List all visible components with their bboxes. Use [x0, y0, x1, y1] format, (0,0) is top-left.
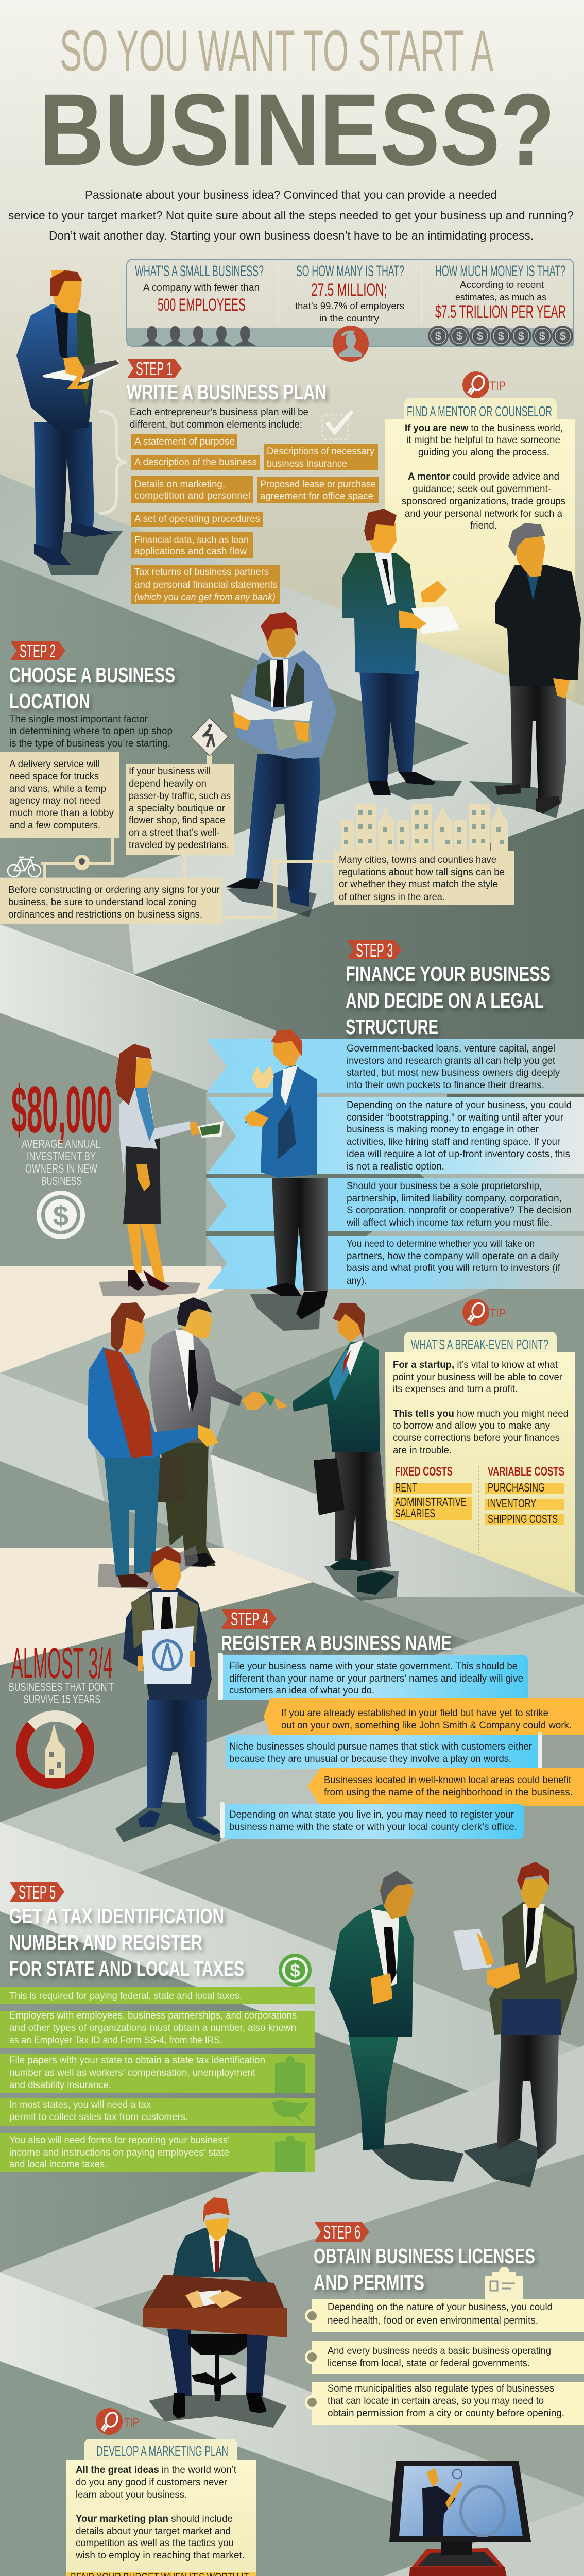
icon: seven dollar coins: $: [560, 330, 566, 343]
figure: man in teal suit with briefcase: [242, 1303, 399, 1601]
text box: city regulations: Many cities, towns and counties have: [339, 855, 496, 866]
costs table: INVENTORY: [488, 1497, 536, 1510]
stat: how many: SO HOW MANY IS THAT?: [296, 263, 404, 280]
tip body: guiding you along the process.: [418, 447, 549, 458]
text box: city regulations: [334, 851, 514, 905]
text: location factor: in determining where to open up shop: [9, 726, 173, 737]
panel: green tax boxes: and disability insurance.: [9, 2080, 111, 2091]
panel: business plan elements: competition and personnel: [134, 490, 250, 501]
heading: choose a business location: LOCATION: [9, 689, 90, 713]
text: location factor: [9, 714, 173, 749]
panel: license list: Some municipalities also regulate types of businesses: [328, 2383, 554, 2394]
panel: business plan elements: and personal financial statements: [134, 580, 278, 590]
tip body: Your marketing plan should include: [76, 2514, 233, 2524]
panel: green tax boxes: number as well as workers’ compensation, unemployment: [9, 2067, 256, 2078]
ribbon text: You need to determine whether you will take on: [347, 1239, 535, 1249]
panel: green tax boxes: permit to collect sales tax from customers.: [9, 2112, 188, 2123]
panel: business plan elements: A statement of purpose: [134, 436, 235, 447]
figure: man at desk: [143, 2197, 287, 2428]
figure: monitor on pedestal: [372, 2461, 544, 2576]
icon: tip bulb: [462, 371, 489, 398]
stat: what's a small business: WHAT’S A SMALL BUSINESS?: [135, 263, 264, 280]
ribbon text: [346, 1043, 572, 1286]
icon: dollar coin: $: [53, 1200, 68, 1231]
stat: almost 3/4: BUSINESSES THAT DON’T: [9, 1680, 114, 1693]
icon: seven dollar coins: $: [518, 330, 524, 343]
stat: how much money: [435, 263, 566, 322]
text box: delivery service: and a few computers.: [9, 820, 100, 831]
text box: delivery service: and vans, while a temp: [9, 784, 106, 794]
icon: seven dollar coins: $: [477, 330, 483, 343]
callout: niche businesses: [226, 1732, 542, 1769]
tip body: guidance; seek out government-: [413, 484, 551, 495]
tip body: sponsored organizations, trade groups: [402, 496, 565, 507]
figure: man in blue jacket and red sweater: [88, 1302, 218, 1589]
figure: mentor holding paper: [342, 509, 462, 800]
ribbon text: consider “bootstrapping,” or waiting until after your: [347, 1112, 564, 1123]
ribbon text: is not a realistic option.: [347, 1161, 444, 1172]
figure: man in grey suit: [149, 1297, 242, 1567]
figure: thoughtful man in black suit: [469, 523, 581, 818]
icon: pedestrian sign: [191, 718, 228, 765]
stat: how many: 27.5 MILLION;: [311, 280, 387, 300]
ribbon text: basis and what profit you will return to investors (if: [347, 1263, 561, 1274]
tip body: course corrections before your finances: [393, 1433, 560, 1444]
icon: dollar coin: [37, 1191, 85, 1239]
text box: signs: business, be sure to understand local zoning: [8, 897, 196, 908]
callout: file your name: [218, 1653, 528, 1700]
heading: obtain licenses: AND PERMITS: [314, 2270, 424, 2294]
text box: delivery service: agency may not need: [9, 795, 100, 806]
step 6 badge: [315, 2222, 369, 2243]
panel: business plan elements: business insurance: [267, 459, 347, 469]
stat: how many: [295, 263, 404, 324]
text: ALMOST 3/4: [11, 1639, 113, 1687]
panel: register name callouts: [218, 1653, 584, 1839]
text box: signs: [0, 878, 222, 924]
stat: what's a small business: A company with fewer than: [143, 282, 260, 293]
tip body: are in trouble.: [393, 1445, 452, 1456]
panel: license list: [305, 2299, 584, 2425]
panel: green tax boxes: File papers with your state to obtain a state tax identification: [9, 2055, 265, 2066]
heading: obtain licenses: [314, 2244, 535, 2294]
ribbon text: partnership, limited liability company, corporation,: [347, 1193, 562, 1204]
stat: almost 3/4: SURVIVE 15 YEARS: [23, 1692, 100, 1706]
tip body: details about your target market and: [76, 2526, 231, 2537]
panel: business plan elements: A set of operating procedures: [134, 514, 260, 524]
icon: five people: [141, 326, 256, 346]
panel: tip find a mentor: [385, 371, 575, 702]
text box: passer-by traffic: a specialty boutique or: [129, 803, 226, 814]
panel: tip break-even: [385, 1299, 575, 1594]
panel: business plan elements: A description of the business: [134, 457, 257, 468]
tip body: to borrow and allow you to make any: [393, 1420, 550, 1431]
icon: clipboard: [275, 2136, 305, 2172]
heading: get a tax id: NUMBER AND REGISTER: [9, 1930, 202, 1954]
figure: man reading map: [225, 612, 337, 917]
panel: business plan elements: Financial data, such as loan: [134, 535, 249, 546]
ribbon text: idea will require a lot of up-front inventory costs, this: [347, 1149, 570, 1160]
icon: green coin: [279, 1954, 312, 1987]
tip body: do you any good if customers never: [76, 2477, 228, 2488]
ribbon text: into their own pockets to finance their dreams.: [347, 1080, 544, 1091]
figure: man in blue jacket: [244, 1029, 328, 1331]
icon: US map: [272, 2100, 309, 2123]
panel: business plan elements: [131, 434, 379, 604]
panel: business plan elements: (which you can get from any bank): [134, 592, 276, 603]
panel: blue ribbons: [207, 1039, 584, 1289]
callout: niche businesses: Niche businesses should pursue names that stick with customers either: [229, 1741, 533, 1752]
tip body: For a startup, it’s vital to know at what: [393, 1360, 558, 1370]
callout: local areas: Businesses located in well-known local areas could benefit: [324, 1775, 572, 1786]
ribbon text: any).: [347, 1276, 367, 1286]
panel: green tax boxes: [0, 1987, 315, 2172]
stat: how much money: According to recent: [460, 280, 544, 290]
text box: city regulations: of other signs in the area.: [339, 892, 445, 903]
text box: passer-by traffic: depend heavily on: [129, 778, 207, 789]
costs table: [393, 1465, 564, 1554]
icon: curly bracket: [99, 411, 127, 514]
costs table: PURCHASING: [488, 1481, 545, 1494]
text: location factor: is the type of business you’re starting.: [9, 738, 170, 749]
panel: green tax boxes: as an Employer Tax ID and Form SS-4, from the IRS.: [9, 2035, 222, 2046]
text box: passer-by traffic: passer-by traffic, such as: [129, 791, 231, 802]
tip body: If you are new to the business world,: [405, 423, 563, 434]
costs table: SALARIES: [395, 1506, 435, 1520]
callout: local areas: from using the name of the neighborhood in the business.: [324, 1787, 573, 1798]
costs table: ADMINISTRATIVE: [395, 1495, 467, 1509]
tip body: wish to employ in reaching that market.: [75, 2550, 245, 2561]
tip body: competition as well as the tactics you: [76, 2538, 234, 2549]
stat: how many: in the country: [319, 313, 379, 324]
text box: signs: Before constructing or ordering any signs for your: [8, 885, 220, 895]
icon: tip bulb: [462, 1299, 489, 1326]
step 6 badge: STEP 6: [323, 2222, 360, 2243]
text box: passer-by traffic: flower shop, find space: [129, 815, 225, 826]
callout: register with the state: business name with the state or with your local county clerk’s office.: [229, 1822, 517, 1833]
callout: file your name: File your business name with your state government. This should be: [229, 1661, 518, 1672]
stat: $80,000: OWNERS IN NEW: [25, 1162, 97, 1175]
callout: file your name: different than your name or your partners’ names and ideally will give: [229, 1673, 523, 1684]
panel: license list: Depending on the nature of your business, you could: [328, 2302, 553, 2313]
intro text: Don’t wait another day. Starting your own business doesn’t have to be an intimidating process.: [49, 229, 534, 242]
panel: license list: that can locate in certain areas, so you may need to: [328, 2396, 544, 2406]
panel: green tax boxes: income and instructions on paying employees’ state: [9, 2147, 229, 2158]
icon: city skyline: [341, 804, 508, 851]
panel: business plan elements: Tax returns of business partners: [134, 567, 269, 578]
text box: passer-by traffic: [126, 764, 234, 855]
step 4 badge: STEP 4: [231, 1608, 268, 1630]
figure: woman handing money: [99, 1044, 224, 1296]
panel: license list: license from local, state or federal governments.: [328, 2358, 530, 2369]
icon: seven dollar coins: $: [539, 330, 545, 343]
panel: license list: obtain permission from a city or county before opening.: [328, 2408, 564, 2419]
connectors and bicycle icon: [8, 838, 335, 917]
icon: seven dollar coins: $: [456, 330, 462, 343]
panel: green tax boxes: This is required for paying federal, state and local taxes.: [9, 1991, 242, 2002]
icon: green coin: $: [290, 1961, 300, 1981]
ribbon text: investors and research grants all can help you get: [347, 1056, 556, 1066]
figure: man in green suit: [329, 1871, 463, 2182]
heading: register a business name: REGISTER A BUSINESS NAME: [221, 1631, 452, 1655]
text: $80,000: [11, 1073, 112, 1147]
tip body: [402, 423, 565, 531]
text: common elements: Each entrepreneur’s business plan will be: [130, 407, 308, 418]
ribbon text: Depending on the nature of your business, you could: [347, 1100, 572, 1111]
stat: almost 3/4: [9, 1639, 114, 1706]
stat: how many: that’s 99.7% of employers: [295, 301, 404, 311]
panel: tip develop a marketing plan: TIP: [124, 2416, 139, 2430]
panel: green tax boxes: In most states, you will need a tax: [9, 2099, 151, 2110]
figure: man in olive suit with paper: [453, 1862, 577, 2187]
step 2 badge: STEP 2: [20, 640, 56, 662]
step 5 badge: STEP 5: [19, 1882, 56, 1903]
callout: established in field: If you are already established in your field but have yet to strike: [281, 1708, 548, 1719]
heading: get a tax id: FOR STATE AND LOCAL TAXES: [9, 1957, 244, 1980]
callout: register with the state: Depending on what state you live in, you may need to register your: [229, 1809, 514, 1820]
ribbon text: activities, like hiring staff and renting space. If your: [347, 1137, 561, 1147]
panel: small business stats: [127, 259, 574, 362]
step 3 badge: [347, 940, 402, 961]
tip body: it might be helpful to have someone: [406, 435, 560, 446]
step 1 badge: [127, 358, 182, 379]
icon: seven dollar coins: $: [498, 330, 504, 343]
text box: delivery service: A delivery service will: [9, 759, 100, 770]
ribbon text: partners, how the company will operate on a daily: [347, 1251, 559, 1262]
step 1 badge: STEP 1: [136, 358, 173, 379]
tip body: All the great ideas in the world won’t: [76, 2465, 237, 2476]
ribbon text: will affect which income tax return you must file.: [346, 1217, 552, 1228]
icon: pie ring with building: [8, 1702, 102, 1797]
step 4 badge: [221, 1608, 277, 1630]
panel: green tax boxes: and other types of organizations must obtain a number, also known: [9, 2023, 296, 2033]
heading: get a tax id: [9, 1904, 244, 1980]
stat: what's a small business: [135, 263, 264, 315]
icon: seven dollar coins: [428, 326, 573, 346]
tip body: This tells you how much you might need: [393, 1409, 569, 1419]
panel: business plan elements: applications and cash flow: [134, 546, 247, 557]
text box: passer-by traffic: traveled by pedestrians.: [129, 840, 229, 851]
text box: passer-by traffic: If your business will: [129, 766, 211, 777]
text box: delivery service: much more than a lobby: [9, 808, 114, 819]
figure: man writing in notebook: [16, 270, 123, 575]
heading: choose a business location: [9, 663, 175, 713]
figure: man holding logo sign: [115, 1546, 224, 1842]
tip body: A mentor could provide advice and: [408, 471, 559, 482]
heading: get a tax id: GET A TAX IDENTIFICATION: [9, 1904, 224, 1928]
icon: permit clipboard: [485, 2267, 523, 2299]
callout: established in field: [264, 1698, 584, 1735]
costs table: FIXED COSTS: [395, 1465, 453, 1479]
stat: how much money: estimates, as much as: [455, 292, 546, 302]
intro text: Passionate about your business idea? Convinced that you can provide a needed: [85, 188, 497, 201]
heading: finance your business: STRUCTURE: [346, 1015, 438, 1039]
panel: tip find a mentor: TIP: [490, 379, 506, 393]
panel: business plan elements: Details on marketing,: [134, 479, 225, 490]
ribbon text: started, but most new business owners dig deeply: [347, 1067, 560, 1078]
heading: choose a business location: CHOOSE A BUSINESS: [9, 663, 175, 687]
stat: $80,000: [11, 1073, 112, 1188]
heading: write a business plan: WRITE A BUSINESS PLAN: [127, 380, 327, 404]
text: common elements: [130, 407, 308, 430]
callout: register with the state: [220, 1802, 524, 1839]
panel: license list: need health, food or even environmental permits.: [328, 2315, 538, 2326]
callout: niche businesses: because they are unusual or because they involve a play on words.: [229, 1754, 511, 1765]
ribbon text: Government-backed loans, venture capital, angel: [347, 1043, 555, 1054]
stat: $80,000: BUSINESS: [41, 1174, 82, 1188]
text: location factor: The single most important factor: [9, 714, 148, 725]
panel: tip break-even: TIP: [490, 1307, 506, 1320]
ribbon text: S corporation, nonprofit or cooperative? The decision: [347, 1205, 572, 1216]
text box: passer-by traffic: on a street that’s well-: [129, 827, 220, 838]
ribbon text: Should your business be a sole proprietorship,: [347, 1181, 542, 1192]
callout: file your name: customers an idea of what you do.: [229, 1685, 374, 1696]
callout: local areas: [307, 1768, 584, 1806]
tip body: point your business will be able to cover: [393, 1372, 563, 1383]
text box: signs: ordinances and restrictions on business signs.: [8, 909, 202, 920]
tip body: and your personal network for such a: [405, 509, 562, 519]
intro text: [8, 188, 574, 242]
icon: seven dollar coins: $: [435, 330, 441, 343]
heading: finance your business: [346, 962, 551, 1039]
intro text: service to your target market? Not quite sure about all the steps needed to get your business up and running?: [8, 209, 574, 222]
panel: business plan elements: agreement for office space: [260, 491, 373, 502]
tip body: its expenses and turn a profit.: [393, 1384, 518, 1395]
tip heading: DEVELOP A MARKETING PLAN: [96, 2443, 228, 2459]
tip body: [393, 1360, 569, 1456]
costs table: RENT: [395, 1481, 417, 1494]
callout: established in field: out on your own, something like John Smith & Company could work.: [281, 1720, 572, 1731]
text box: city regulations: regulations about how tall signs can be: [339, 867, 505, 878]
icon: tip bulb: [96, 2408, 123, 2435]
panel: tip develop a marketing plan: [66, 2408, 256, 2576]
step 2 badge: [10, 640, 65, 662]
icon: checkbox: [322, 410, 354, 439]
title: [39, 19, 555, 187]
text: common elements: different, but common elements include:: [130, 419, 302, 430]
panel: green tax boxes: and local income taxes.: [9, 2159, 107, 2170]
tip body: friend.: [470, 520, 497, 531]
text box: delivery service: [0, 752, 119, 838]
step 5 badge: [10, 1882, 64, 1903]
panel: green tax boxes: Employers with employees, business partnerships, and corporations: [9, 2010, 297, 2021]
icon: clipboard: [275, 2056, 305, 2093]
ribbon text: business is making money to engage in other: [347, 1124, 539, 1135]
panel: business plan elements: Descriptions of necessary: [267, 446, 374, 457]
panel: license list: And every business needs a basic business operating: [328, 2346, 551, 2357]
panel: green tax boxes: You also will need forms for reporting your business’: [9, 2135, 230, 2146]
stat: $80,000: AVERAGE ANNUAL: [22, 1137, 100, 1150]
text box: city regulations: or whether they must match the style: [339, 879, 498, 890]
stat: what's a small business: 500 EMPLOYEES: [158, 295, 246, 315]
tip body: [75, 2465, 245, 2561]
icon: red person circle: [333, 326, 369, 362]
step 3 badge: STEP 3: [356, 940, 393, 961]
tip body: learn about your business.: [76, 2489, 187, 2500]
stat: $80,000: INVESTMENT BY: [27, 1149, 96, 1163]
text box: delivery service: need space for trucks: [9, 771, 99, 782]
panel: business plan elements: Proposed lease or purchase: [260, 479, 376, 490]
